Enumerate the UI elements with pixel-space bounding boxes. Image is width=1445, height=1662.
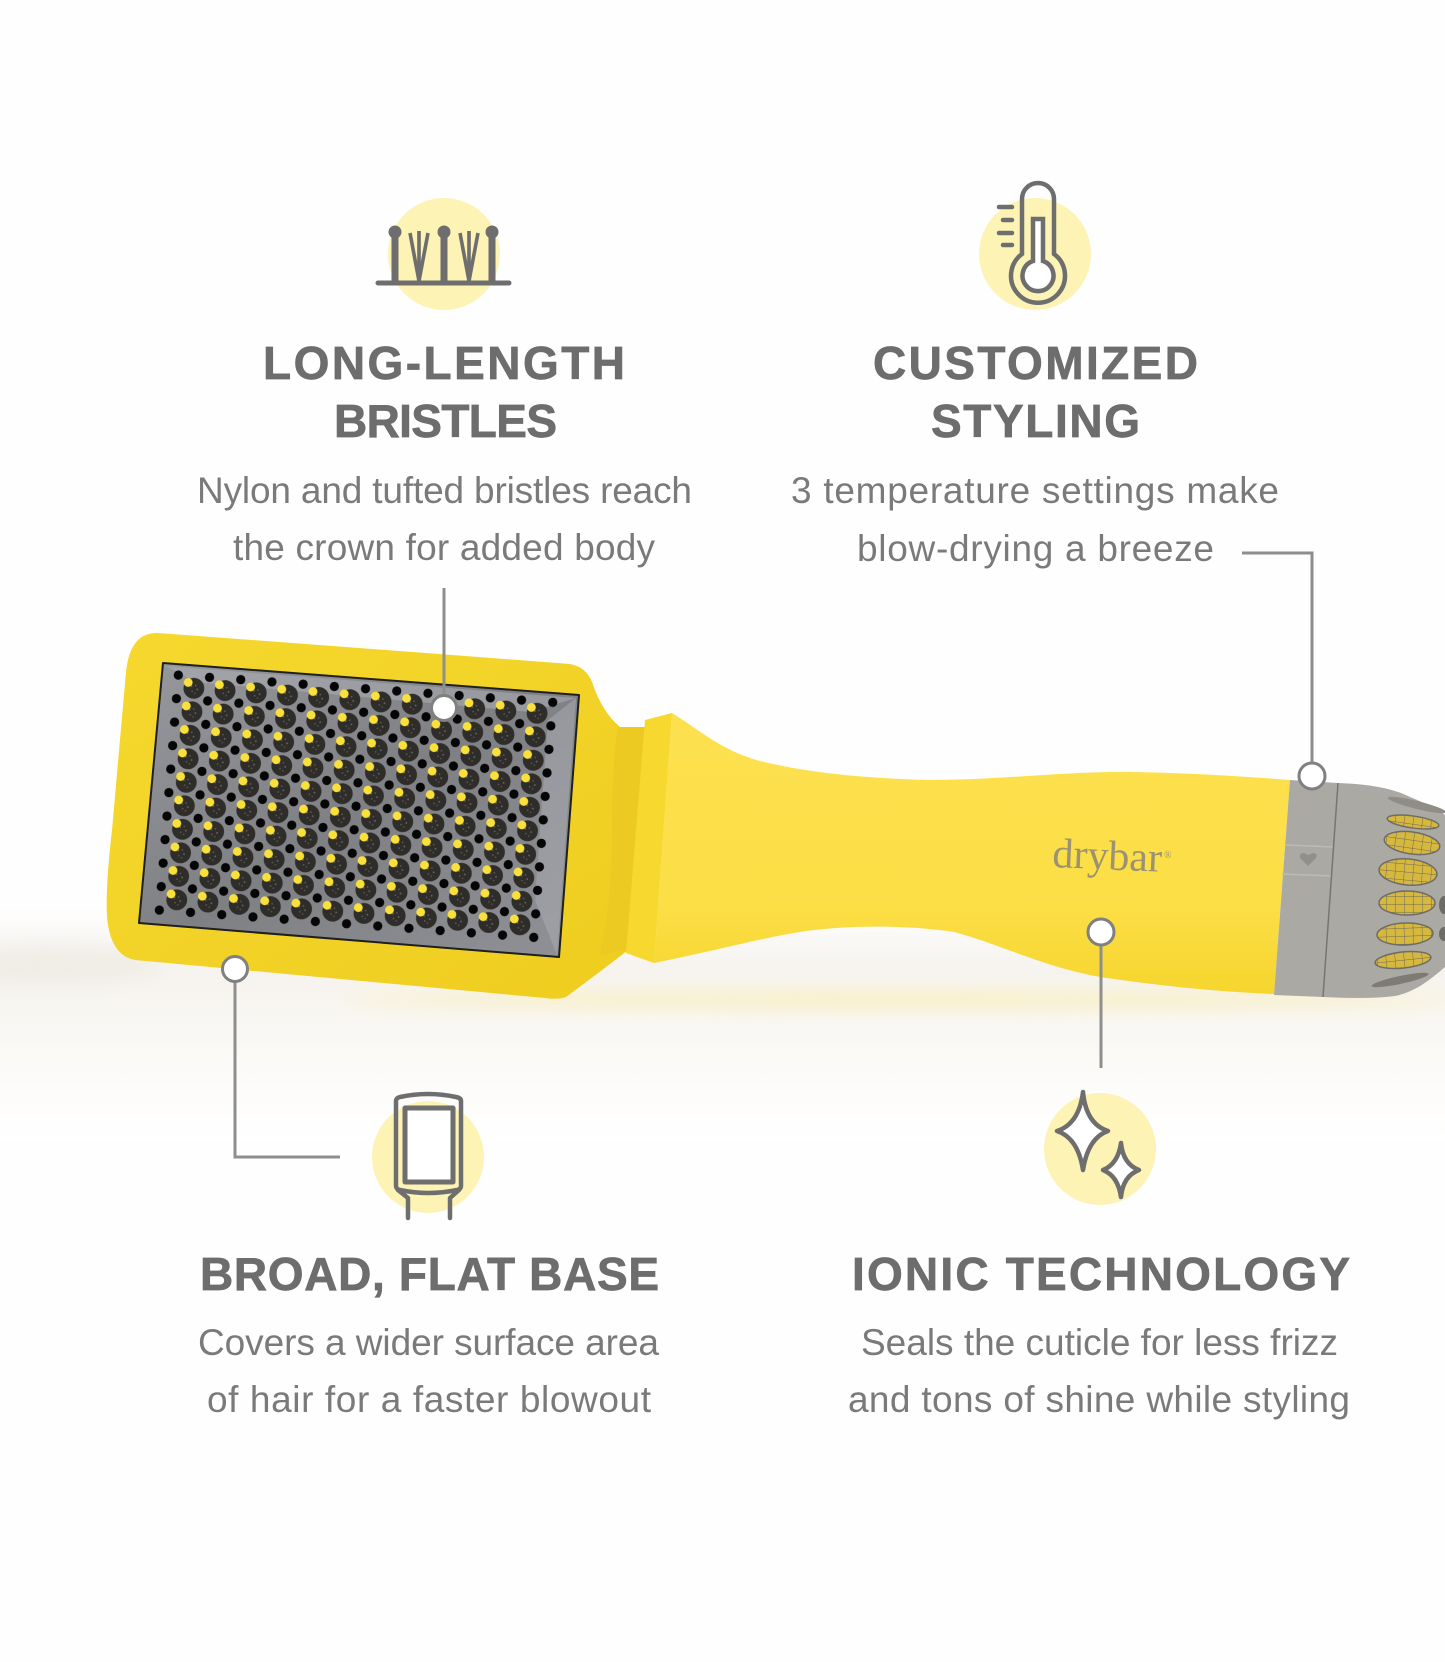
- drybar logo: ®: [1164, 850, 1172, 861]
- heading: [873, 337, 1198, 447]
- icon: bristles: [378, 198, 509, 310]
- drybar logo: drybar: [1052, 831, 1163, 882]
- description: blow-drying a breeze: [857, 528, 1214, 569]
- leader line: [1242, 553, 1325, 789]
- callout: long-length bristles: [197, 198, 692, 720]
- callout: customized styling: [791, 183, 1325, 789]
- heading: BRISTLES: [334, 395, 557, 447]
- description: [198, 1322, 659, 1420]
- description: the crown for added body: [233, 527, 656, 568]
- callout: broad, flat base: [198, 956, 659, 1420]
- heading: BROAD, FLAT BASE: [200, 1248, 659, 1300]
- product: hair dryer brush: [107, 633, 1445, 999]
- leader line: [1088, 919, 1114, 1068]
- description: 3 temperature settings make: [791, 470, 1279, 511]
- icon: thermometer: [979, 183, 1091, 310]
- icon: flat base: [372, 1094, 484, 1218]
- bristle plate: [139, 662, 579, 957]
- description: Covers a wider surface area: [198, 1322, 659, 1363]
- heading: CUSTOMIZED: [873, 337, 1198, 389]
- air vent grill: [1323, 783, 1445, 998]
- heading: [263, 337, 625, 447]
- description: Nylon and tufted bristles reach: [197, 470, 692, 511]
- heading: LONG-LENGTH: [263, 337, 625, 389]
- heading: IONIC TECHNOLOGY: [852, 1248, 1350, 1300]
- leader line: [222, 956, 340, 1157]
- heading: STYLING: [931, 395, 1140, 447]
- description: [197, 470, 692, 568]
- plate holes: [154, 670, 558, 942]
- neck: [620, 727, 644, 908]
- description: and tons of shine while styling: [848, 1379, 1350, 1420]
- callout: ionic technology: [848, 919, 1350, 1420]
- icon: sparkles: [1044, 1092, 1156, 1205]
- handle collar: [626, 713, 672, 963]
- description: [791, 470, 1279, 569]
- description: Seals the cuticle for less frizz: [861, 1322, 1338, 1363]
- brush head: [107, 633, 632, 999]
- handle: [654, 713, 1290, 994]
- grey collar band: [1274, 780, 1338, 997]
- bristle tufts with yellow tips: [159, 675, 553, 937]
- leader line: [432, 588, 456, 720]
- description: of hair for a faster blowout: [207, 1379, 652, 1420]
- description: [848, 1322, 1350, 1420]
